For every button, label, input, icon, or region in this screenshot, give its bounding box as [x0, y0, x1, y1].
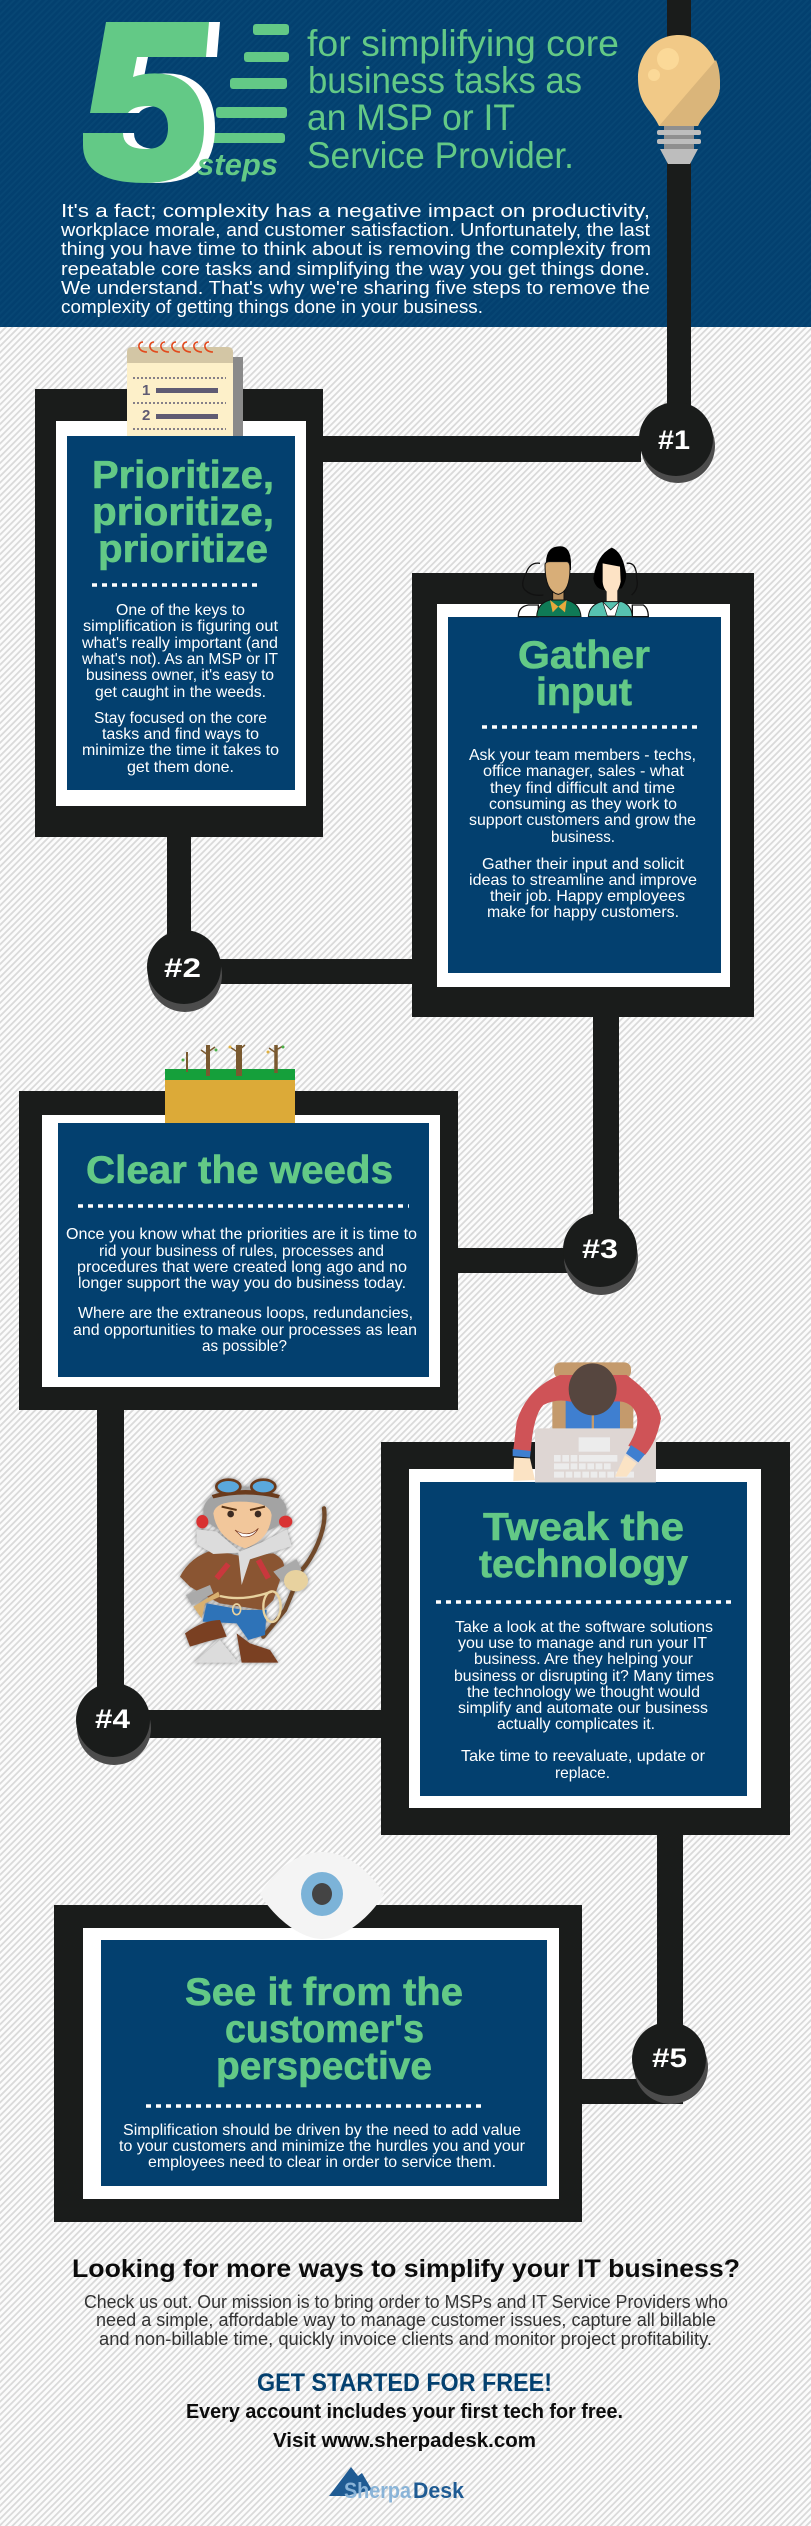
- heading: tweak the technology: Tweak the: [483, 1506, 684, 1549]
- heading: prioritize: [92, 454, 274, 571]
- connector: step 4 box to step 5: [575, 1830, 683, 2104]
- text: gather body: make for happy customers.: [487, 904, 679, 921]
- footer heading: Looking for more ways to simplify your IT business?: [72, 2255, 740, 2283]
- text: tweak body: business or disrupting it? Many times: [454, 1668, 714, 1685]
- icon: person at laptop: [513, 1362, 661, 1482]
- icon: ground with trees: [165, 1045, 295, 1123]
- text: prioritize body: [81, 602, 279, 776]
- text: gather body: consuming as they work to: [489, 796, 677, 813]
- badge: #3: [563, 1213, 638, 1295]
- connector: step 1 to step 2 to gather box: [167, 830, 420, 984]
- heading: prioritize: prioritize,: [92, 491, 274, 534]
- text: clear the weeds body: Where are the extraneous loops, redundancies,: [78, 1305, 413, 1322]
- badge: #1: [639, 402, 715, 483]
- footer text: [84, 2292, 728, 2349]
- text: clear the weeds body: and opportunities to make our processes as lean: [73, 1322, 417, 1339]
- heading: see it from the customer's perspective: customer's: [225, 2008, 424, 2051]
- text: clear the weeds body: procedures that were created long ago and no: [77, 1259, 407, 1276]
- panel: step 2 gather input: [412, 546, 754, 1017]
- icon: notepad: 2: [142, 407, 150, 424]
- title: business tasks as: [308, 60, 582, 101]
- text: prioritize body: One of the keys to: [116, 602, 245, 619]
- intro text: repeatable core tasks and simplifying the way you get things done.: [61, 259, 650, 279]
- intro text: complexity of getting things done in your business.: [61, 297, 483, 317]
- intro text: [60, 201, 651, 317]
- title: Service Provider.: [307, 135, 574, 176]
- badge: #4: [76, 1683, 151, 1765]
- text: prioritize body: get them done.: [127, 759, 234, 776]
- text: prioritize body: what's really important (and: [81, 635, 278, 652]
- heading: tweak the technology: [479, 1506, 688, 1586]
- text: tweak body: [454, 1619, 714, 1782]
- heading: see it from the customer's perspective: See it from the: [185, 1971, 463, 2014]
- footer text: and non-billable time, quickly invoice clients and monitor project profitability.: [99, 2329, 712, 2349]
- text: tweak body: Take time to reevaluate, update or: [461, 1748, 706, 1765]
- text: gather body: office manager, sales - what: [483, 763, 685, 780]
- heading: prioritize: Prioritize,: [92, 454, 274, 497]
- heading: prioritize: prioritize: [98, 528, 268, 571]
- icon: two people: [518, 546, 648, 617]
- badge: #5: #5: [652, 2043, 687, 2073]
- text: gather body: support customers and grow the: [469, 812, 696, 829]
- icon: notepad: 1: [142, 382, 150, 399]
- logo: sherpadesk: [329, 2467, 465, 2503]
- icon: light bulb: [638, 35, 720, 164]
- badge: #2: #2: [164, 953, 201, 983]
- footer text: Check us out. Our mission is to bring order to MSPs and IT Service Providers who: [84, 2292, 728, 2312]
- title: [307, 23, 619, 176]
- text: prioritize body: Stay focused on the core: [94, 710, 267, 727]
- text: gather body: business.: [551, 829, 615, 846]
- heading: clear the weeds: Clear the weeds: [86, 1149, 393, 1192]
- text: prioritize body: tasks and find ways to: [102, 726, 259, 743]
- header band: [0, 0, 811, 327]
- text: tweak body: you use to manage and run your IT: [458, 1635, 707, 1652]
- connector: step 2 box to step 3: [450, 1010, 619, 1273]
- text: clear the weeds body: as possible?: [202, 1338, 287, 1355]
- badge: #3: #3: [582, 1234, 618, 1264]
- heading: big 5 steps logo: steps: [197, 147, 278, 182]
- badge: #2: [147, 930, 222, 1012]
- text: clear the weeds body: longer support the way you do business today.: [78, 1275, 406, 1292]
- intro text: We understand. That's why we're sharing five steps to remove the: [61, 278, 650, 298]
- call to action: GET STARTED FOR FREE!: [257, 2369, 552, 2397]
- intro text: thing you have time to think about is removing the complexity from: [61, 239, 651, 259]
- logo: sherpadesk: Sherpa: [344, 2478, 412, 2503]
- panel: step 4 tweak the technology: [381, 1362, 790, 1835]
- heading: see it from the customer's perspective: perspective: [216, 2045, 432, 2088]
- connector: step 3 box to step 4: [97, 1400, 390, 1738]
- panel: step 3 clear the weeds: [19, 1045, 458, 1410]
- icon: notepad: [127, 342, 243, 436]
- heading: see it from the customer's perspective: [185, 1971, 463, 2088]
- text: prioritize body: minimize the time it takes to: [82, 742, 279, 759]
- panel: step 5 customer perspective: [54, 1852, 582, 2222]
- text: tweak body: simplify and automate our business: [458, 1700, 708, 1717]
- badge: #5: [632, 2022, 708, 2104]
- text: prioritize body: get caught in the weeds.: [95, 684, 266, 701]
- heading: tweak the technology: technology: [479, 1543, 688, 1586]
- connector: top line to step 1: [323, 0, 691, 462]
- text: prioritize body: what's not). As an MSP or IT: [81, 651, 278, 668]
- text: clear the weeds body: Once you know what the priorities are it is time to: [66, 1226, 417, 1243]
- text: see it body: to your customers and minimize the hurdles you and your: [119, 2138, 526, 2155]
- badge: #4: #4: [95, 1704, 130, 1734]
- offer line: Every account includes your first tech for free.: [186, 2401, 623, 2423]
- text: gather body: Ask your team members - techs,: [469, 747, 696, 764]
- logo: sherpadesk: Desk: [413, 2478, 465, 2503]
- text: tweak body: the technology we thought would: [467, 1684, 700, 1701]
- text: clear the weeds body: [66, 1226, 417, 1355]
- illustration: sherpa mascot: [180, 1480, 324, 1663]
- text: gather body: their job. Happy employees: [490, 888, 685, 905]
- website line: Visit www.sherpadesk.com: [273, 2430, 536, 2452]
- badge: #1: #1: [658, 425, 690, 455]
- intro text: It's a fact; complexity has a negative impact on productivity,: [61, 201, 650, 221]
- text: clear the weeds body: rid your business of rules, processes and: [99, 1243, 384, 1260]
- text: gather body: they find difficult and time: [490, 780, 675, 797]
- text: gather body: ideas to streamline and improve: [469, 872, 697, 889]
- text: tweak body: replace.: [555, 1765, 610, 1782]
- text: prioritize body: business owner, it's easy to: [86, 667, 274, 684]
- footer text: need a simple, affordable way to manage customer issues, capture all billable: [96, 2310, 716, 2330]
- heading: big 5 steps logo: [83, 22, 289, 183]
- text: see it body: Simplification should be driven by the need to add value: [123, 2122, 521, 2139]
- panel: step 1 prioritize: [35, 342, 323, 837]
- heading: gather input: input: [536, 671, 632, 714]
- intro text: workplace morale, and customer satisfaction. Unfortunately, the last: [60, 220, 650, 240]
- text: gather body: Gather their input and solicit: [482, 856, 685, 873]
- heading: gather input: Gather: [518, 634, 650, 677]
- text: gather body: [469, 747, 697, 921]
- icon: eye: [260, 1852, 384, 1939]
- text: tweak body: actually complicates it.: [497, 1716, 655, 1733]
- text: prioritize body: simplification is figuring out: [83, 618, 279, 635]
- text: see it body: [119, 2122, 526, 2171]
- text: tweak body: Take a look at the software solutions: [455, 1619, 713, 1636]
- heading: gather input: [518, 634, 650, 714]
- text: tweak body: business. Are they helping your: [474, 1651, 694, 1668]
- text: see it body: employees need to clear in order to service them.: [148, 2154, 496, 2171]
- title: for simplifying core: [307, 23, 619, 64]
- title: an MSP or IT: [307, 97, 515, 138]
